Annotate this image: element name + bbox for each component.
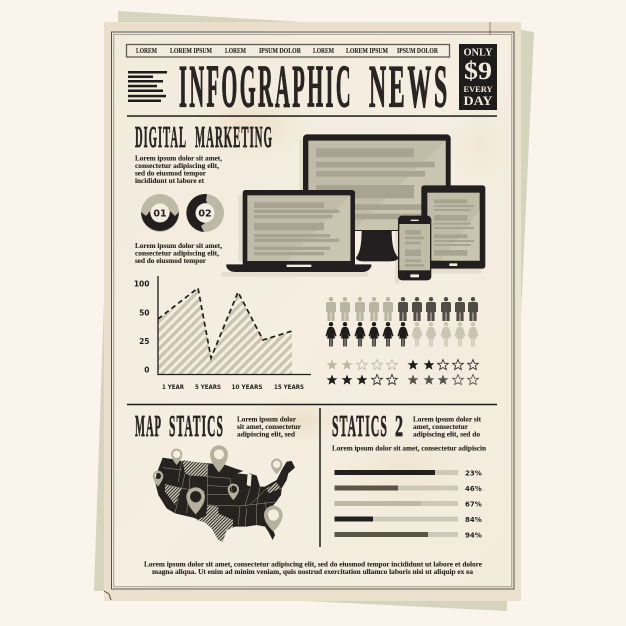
pictogram: women row — [326, 322, 478, 346]
icon: circle 01: 01 — [153, 208, 167, 220]
hatched states — [182, 460, 208, 477]
bar 23% — [334, 470, 482, 478]
bar chart — [334, 470, 482, 540]
chart area — [158, 290, 292, 374]
bar 94%: 94% — [465, 532, 482, 540]
y axis labels — [134, 280, 150, 374]
US map — [153, 445, 295, 542]
header navigation strip: LOREM IPSUM — [170, 47, 212, 55]
text block: second paragraph: consectetur adipiscing elit, — [135, 250, 219, 258]
x axis labels: 1 YEAR — [162, 384, 184, 391]
text block: second paragraph — [135, 242, 222, 265]
text block: intro — [135, 154, 222, 185]
text block: map statics: adipiscing elit, sed — [237, 430, 295, 438]
star ratings — [327, 360, 478, 385]
heading: map statics: MAP — [135, 408, 162, 443]
header navigation strip: LOREM — [136, 47, 157, 55]
price badge: ONLY — [464, 48, 493, 58]
title — [179, 54, 450, 120]
text block: statics 2: adipiscing elit, sed do — [413, 430, 481, 438]
header navigation strip: LOREM — [313, 47, 334, 55]
bar 46% — [334, 485, 482, 493]
text block: second paragraph: sed do eiusmod tempor — [135, 257, 206, 265]
bar 67%: 67% — [465, 500, 482, 508]
pictogram: men row — [326, 297, 478, 321]
text block: map statics: sit amet, consectetur — [237, 423, 301, 431]
text block: statics 2: Lorem ipsum dolor sit — [413, 416, 482, 424]
icon: menu lines — [128, 71, 167, 102]
heading: statics 2 — [332, 408, 403, 443]
bar 84%: 84% — [465, 516, 482, 524]
footer text: magna aliqua. Ut enim ad minim veniam, quis nostrud exercitation ullamco laboris nisi ut aliquip ex ea — [152, 568, 474, 576]
icon: tablet — [421, 185, 485, 269]
icon: phone — [398, 216, 431, 280]
dashed line — [158, 288, 292, 358]
text block: statics 2: Lorem ipsum dolor sit amet, consectetur adipiscin — [332, 444, 486, 452]
text block: intro: incididunt ut labore et — [135, 177, 205, 185]
devices illustration — [222, 134, 485, 283]
text block: intro: sed do eiusmod tempor — [135, 170, 206, 178]
rule under header — [127, 115, 497, 117]
heading: statics 2: 2 — [395, 408, 403, 443]
icon: circle 01 — [141, 194, 179, 232]
text: MARKETING — [195, 119, 273, 154]
text block: intro: Lorem ipsum dolor sit amet, — [135, 154, 222, 162]
text block: map statics — [237, 416, 301, 438]
text block: statics 2 — [332, 416, 486, 452]
icon: circle 02 — [186, 194, 224, 232]
bar 94% — [334, 532, 482, 540]
heading: digital marketing: DIGITAL — [135, 119, 187, 154]
text block: map statics: Lorem ipsum dolor — [237, 416, 296, 424]
icon: laptop — [226, 190, 371, 272]
newspaper sheet — [104, 22, 521, 601]
price badge — [459, 44, 497, 110]
x axis labels: 5 YEARS — [195, 384, 221, 391]
footer text — [144, 560, 482, 576]
y axis labels: 50 — [139, 308, 150, 318]
device shadows — [222, 140, 482, 283]
x axis labels: 15 YEARS — [274, 384, 304, 391]
bar 46%: 46% — [465, 485, 482, 493]
back sheet — [94, 11, 534, 611]
x axis labels — [162, 384, 304, 391]
header navigation strip: IPSUM DOLOR — [259, 47, 302, 55]
text: STATICS — [169, 408, 224, 443]
header navigation strip: LOREM IPSUM — [346, 47, 388, 55]
header navigation strip: LOREM — [225, 47, 246, 55]
text block: statics 2: amet, consectetur — [413, 423, 468, 431]
axes — [158, 276, 311, 374]
icon: circle 02: 02 — [198, 208, 212, 220]
icon: monitor — [303, 134, 451, 261]
text: NEWS — [369, 54, 450, 120]
header navigation strip: IPSUM DOLOR — [397, 47, 439, 55]
text block: intro: consectetur adipiscing elit, — [135, 162, 219, 170]
x axis labels: 10 YEARS — [232, 384, 262, 391]
footer text: Lorem ipsum dolor sit amet, consectetur adipiscing elit, sed do eiusmod tempor incididunt ut labore et dolore — [144, 560, 482, 568]
Michigan gap — [247, 473, 252, 487]
price badge: $9 — [464, 58, 492, 85]
line chart — [134, 276, 311, 391]
header navigation strip — [126, 44, 450, 57]
bar 23%: 23% — [465, 470, 482, 478]
price badge: EVERY — [464, 84, 492, 94]
price badge: DAY — [464, 94, 492, 108]
y axis labels: 25 — [139, 337, 150, 346]
map silhouette — [155, 458, 295, 542]
text: STATICS — [332, 408, 388, 443]
map pins — [153, 445, 283, 532]
bar 84% — [334, 516, 482, 524]
bar 67% — [334, 500, 482, 508]
state lines — [163, 461, 278, 527]
y axis labels: 0 — [144, 366, 150, 374]
section rules — [127, 404, 497, 547]
text block: second paragraph: Lorem ipsum dolor sit amet, — [135, 242, 222, 250]
y axis labels: 100 — [134, 280, 150, 288]
